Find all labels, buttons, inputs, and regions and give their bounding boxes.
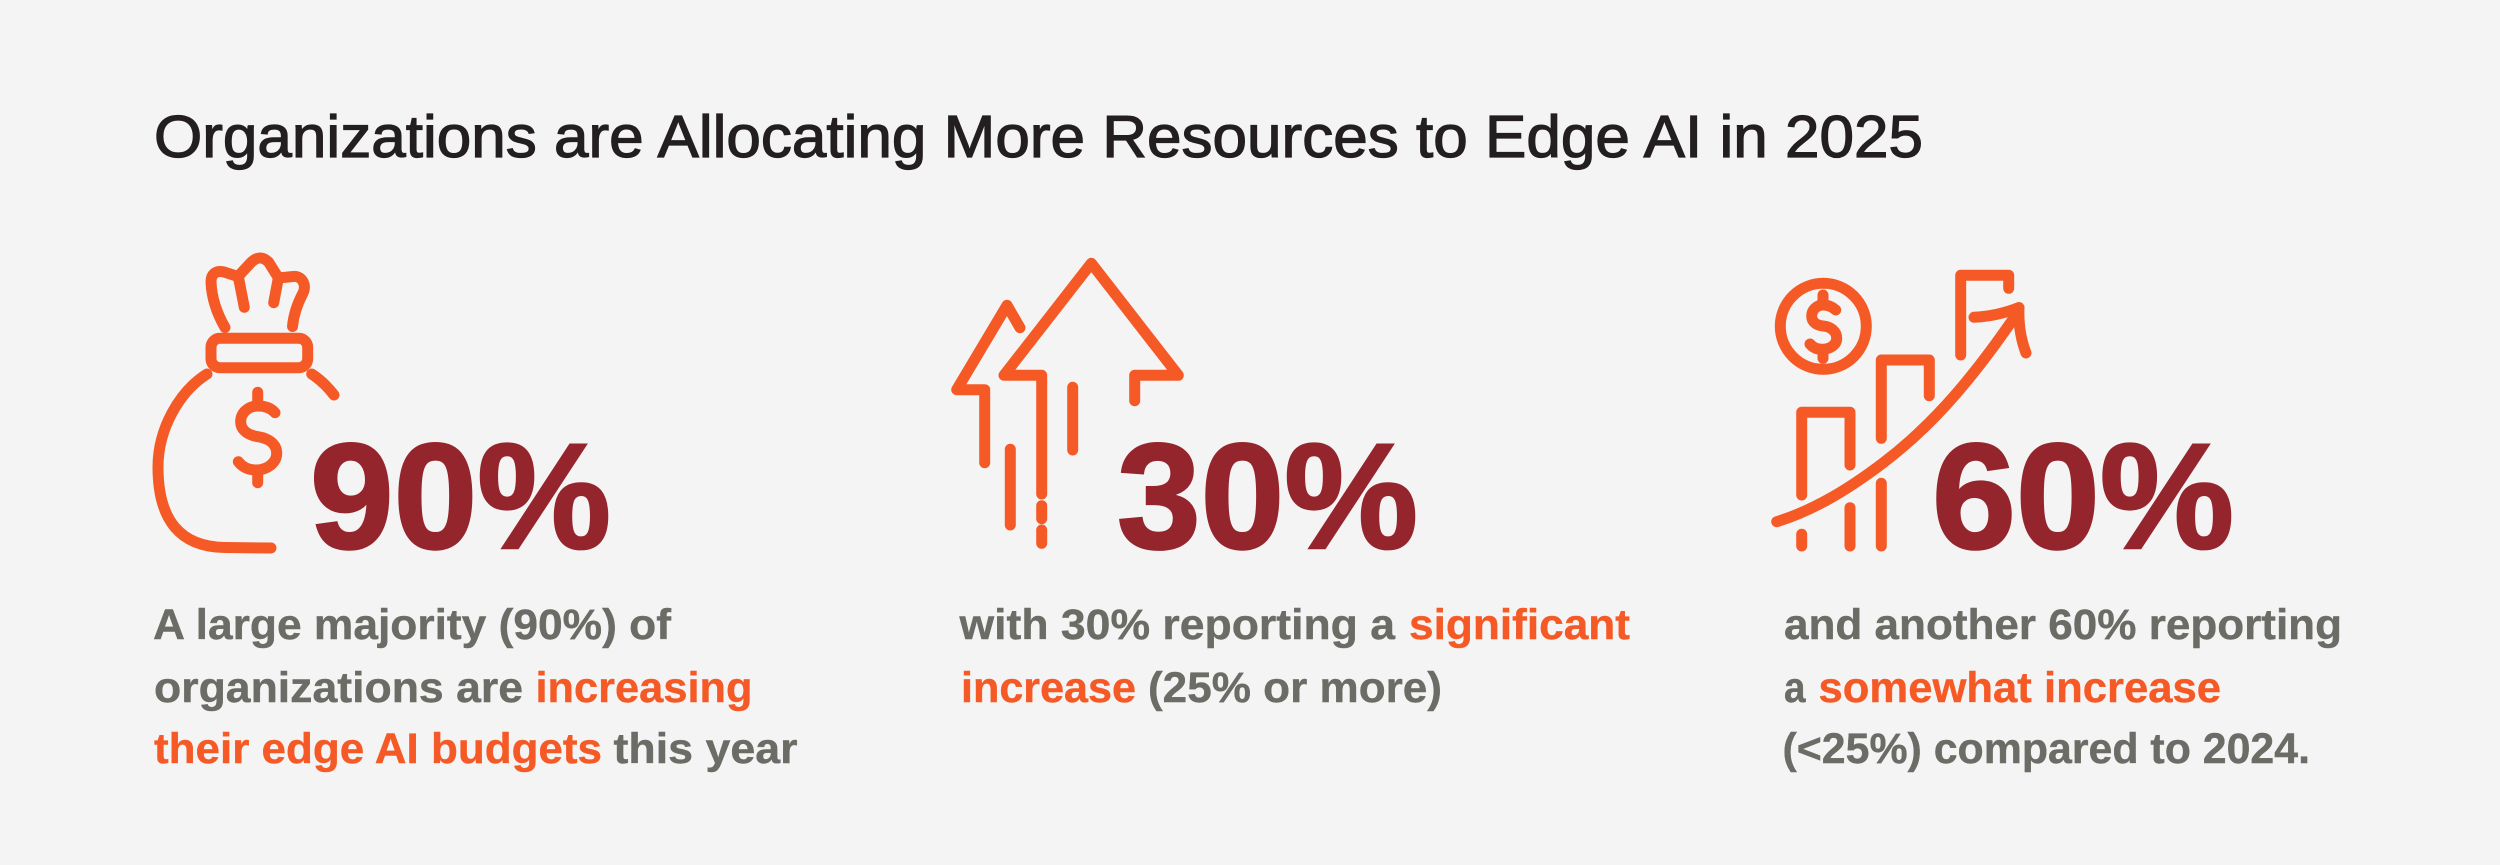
panel: 30% significant increase — [957, 263, 1630, 712]
text: 90% description: A large majority (90%) of — [153, 601, 672, 649]
icon: money bag — [158, 258, 334, 548]
text: 60% description: (<25%) compared to 2024. — [1782, 725, 2310, 773]
text: 90% description: their edge AI budgets — [154, 725, 602, 773]
text: 30% description: increase — [961, 664, 1136, 712]
stat: 60%: 60% — [1932, 412, 2234, 580]
panel: 90% budgets — [153, 258, 798, 773]
stat: 90%: 90% — [310, 412, 611, 580]
text: 90% description: organizations are — [154, 664, 523, 712]
text: 60% description: a — [1784, 664, 1806, 712]
text: 30% description: (25% or more) — [1148, 664, 1442, 712]
text: 60% description: somewhat increase — [1818, 664, 2221, 712]
text: 30% description: significant — [1409, 601, 1630, 649]
title: Organizations are Allocating More Resources to Edge AI in 2025 — [154, 104, 1923, 170]
text: 30% description: with 30% reporting a — [958, 601, 1396, 649]
text: 60% description — [1782, 601, 2342, 773]
stat: 30%: 30% — [1117, 412, 1418, 580]
text: 90% description: this year — [614, 725, 798, 773]
text: 60% description: and another 60% reporting — [1784, 601, 2342, 649]
text: 90% description: increasing — [536, 664, 752, 712]
text: 90% description — [153, 601, 798, 773]
text: 30% description — [958, 601, 1630, 712]
panel: 60% somewhat increase — [1777, 275, 2342, 773]
icon: coin and growth chart — [1777, 275, 2026, 546]
icon: rising arrows — [957, 263, 1178, 543]
